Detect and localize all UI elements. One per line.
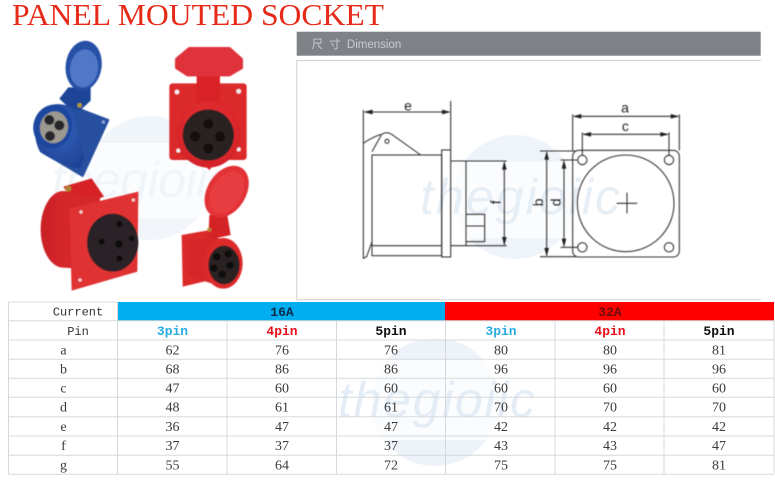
icon: blue 3-pin socket (29, 38, 108, 176)
dimension e (363, 97, 451, 150)
icon: red 5-pin socket, bottom left (41, 178, 138, 291)
row: current: Current (53, 306, 103, 320)
row: a: 76 (275, 344, 289, 358)
dimension a: a (621, 100, 629, 116)
row: a (60, 344, 726, 358)
row: g: 64 (275, 458, 289, 474)
row: f: 43 (603, 439, 617, 454)
row: c: 60 (275, 382, 289, 396)
front view of socket (573, 150, 679, 257)
16A header fill (118, 302, 445, 321)
row: e: 42 (494, 420, 508, 435)
dimension f: f (488, 200, 504, 204)
dimension f (488, 161, 507, 246)
row: c (60, 382, 726, 396)
row: f: 37 (384, 439, 398, 454)
row: pin: 4pin (594, 324, 626, 339)
row: c: 47 (166, 382, 180, 396)
row: pin: Pin (67, 325, 89, 339)
row: c: 60 (603, 382, 617, 396)
row: f: 43 (494, 439, 508, 454)
row: pin: 3pin (157, 324, 188, 339)
dimension b (530, 151, 577, 257)
row: d: 48 (166, 400, 180, 416)
row: b (60, 362, 726, 378)
product photos (29, 38, 258, 291)
row: g: 75 (494, 458, 508, 474)
row: pin (67, 324, 735, 339)
dimension d (547, 160, 577, 247)
32A header fill (445, 302, 774, 321)
row: e: 36 (166, 420, 180, 435)
row: d: 70 (712, 400, 726, 416)
icon: red 5-pin socket with lid, bottom right (182, 158, 258, 289)
dimension c (582, 118, 669, 156)
table grid (8, 302, 774, 474)
row: e (60, 420, 726, 435)
dimension b: b (530, 198, 546, 206)
row: b: 96 (603, 362, 617, 378)
row: g: 75 (603, 458, 617, 474)
dimension e: e (404, 97, 412, 113)
row: d: 61 (275, 400, 289, 416)
specification table (8, 302, 774, 474)
row: pin: 5pin (375, 324, 407, 339)
row: pin: 5pin (703, 324, 735, 339)
row: a: 76 (384, 344, 398, 358)
row: d (60, 400, 726, 416)
dimension a (573, 100, 679, 150)
row: d: d (60, 400, 67, 416)
row: b: 96 (712, 362, 726, 378)
row: c: c (60, 382, 67, 396)
dimension header bar: 尺 寸 Dimension (312, 37, 401, 51)
row: b: b (60, 362, 67, 378)
row: a: 62 (166, 344, 180, 358)
dimension d: d (547, 198, 563, 206)
row: pin: 3pin (485, 324, 517, 339)
row: current: 32A (598, 305, 622, 320)
row: g (60, 458, 726, 474)
row: pin: 4pin (266, 324, 298, 339)
row: c: 60 (384, 382, 398, 396)
row: d: 70 (603, 400, 617, 416)
watermark: product photo (52, 116, 232, 242)
row: a: a (60, 344, 67, 358)
row: f: 47 (712, 439, 726, 454)
row: e: 42 (712, 420, 726, 435)
watermark: table: thegioiic (338, 372, 535, 428)
row: current: 16A (270, 305, 294, 320)
row: a: 81 (712, 344, 726, 358)
row: g: g (60, 458, 67, 474)
watermark: table (338, 338, 535, 466)
row: a: 80 (603, 344, 617, 358)
row: b: 86 (275, 362, 289, 378)
row: e: e (60, 420, 67, 435)
row: a: 80 (494, 344, 508, 358)
watermark: product photo: thegioiic (52, 152, 232, 208)
row: b: 96 (494, 362, 508, 378)
side view of socket (363, 133, 507, 258)
row: c: 60 (712, 382, 726, 396)
row: f: f (61, 439, 66, 454)
row: e: 47 (275, 420, 289, 435)
row: d: 70 (494, 400, 508, 416)
row: e: 42 (603, 420, 617, 435)
row: b: 68 (166, 362, 180, 378)
row: e: 47 (384, 420, 398, 435)
row: g: 55 (166, 458, 180, 474)
row: c: 60 (494, 382, 508, 396)
dimension drawing (363, 97, 679, 258)
dimension c: c (622, 118, 629, 134)
row: b: 86 (384, 362, 398, 378)
row: f: 37 (275, 439, 289, 454)
row: f: 37 (166, 439, 180, 454)
panel: dimension drawing frame (297, 60, 761, 300)
row: d: 61 (384, 400, 398, 416)
row: f (61, 439, 726, 454)
dimension header bar (297, 32, 761, 56)
row: current (53, 305, 622, 320)
watermark: dimension drawing: thegioiic (420, 169, 620, 225)
row: g: 81 (712, 458, 726, 474)
icon: red 4-pin socket, top right (169, 49, 247, 170)
row: g: 72 (384, 458, 398, 474)
watermark: dimension drawing (420, 135, 620, 262)
